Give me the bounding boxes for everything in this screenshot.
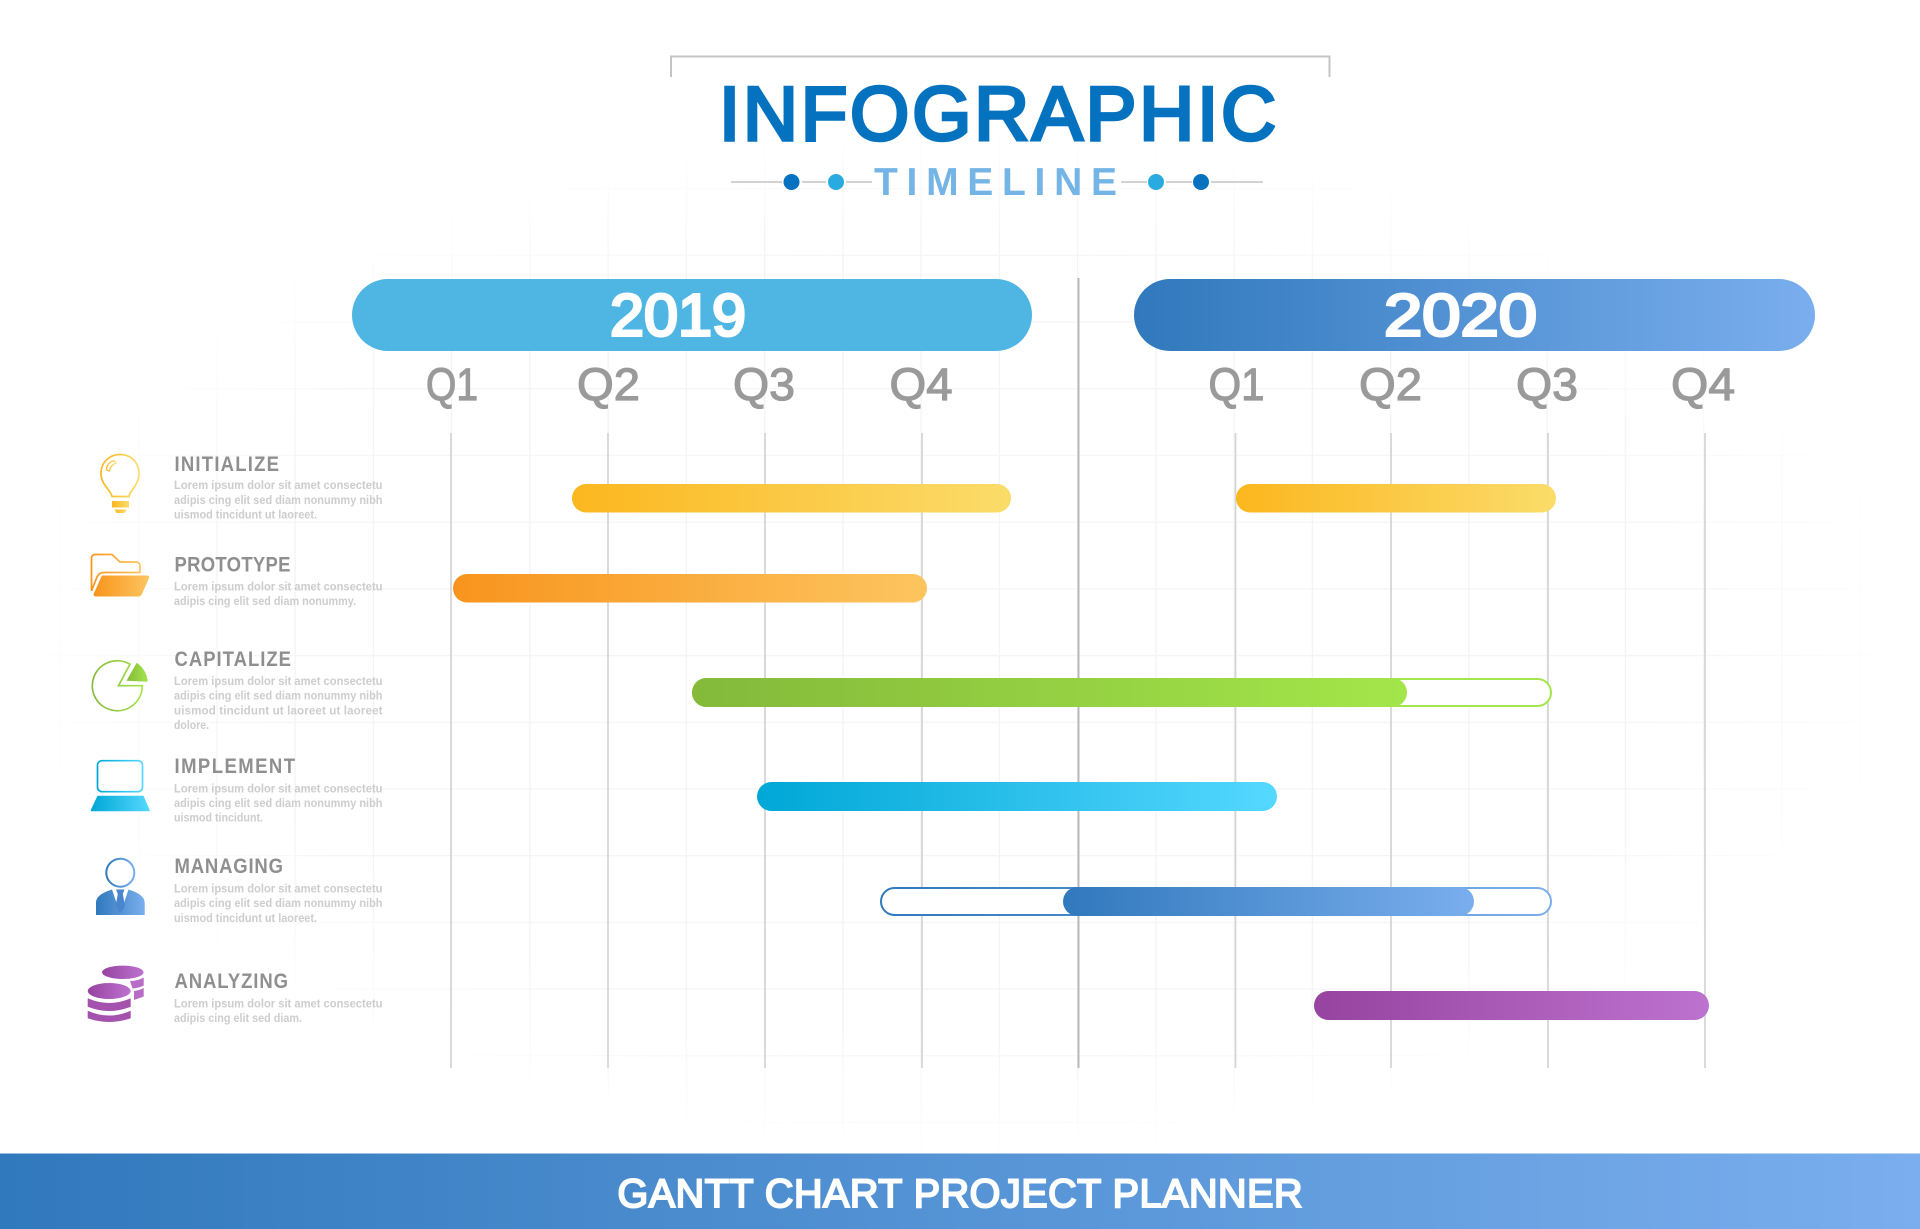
heading: initialize: INITIALIZE [174, 453, 279, 476]
description: managing: uismod tincidunt ut laoreet. [174, 912, 317, 925]
icon: manager [96, 859, 145, 915]
bar: implement [757, 782, 1277, 811]
row: analyzing [88, 966, 382, 1025]
year divider line [1078, 278, 1080, 1068]
description: analyzing: adipis cing elit sed diam. [174, 1012, 302, 1025]
gantt bars [453, 484, 1709, 1020]
description: prototype [174, 580, 382, 608]
heading: implement: IMPLEMENT [174, 755, 296, 778]
year header 2019 [352, 279, 1032, 351]
title bracket [671, 56, 1330, 77]
bar: managing [881, 887, 1551, 916]
description: initialize: Lorem ipsum dolor sit amet consectetu [174, 479, 382, 492]
year header 2020 [1134, 279, 1815, 351]
description: initialize: adipis cing elit sed diam nonummy nibh [174, 494, 382, 507]
quarter labels: Q4 [890, 359, 952, 410]
bar: analyzing [1314, 991, 1709, 1020]
subtitle ornament left [731, 174, 872, 190]
quarter grid lines [451, 433, 1705, 1068]
description: analyzing [174, 997, 382, 1025]
row: capitalize [92, 648, 383, 732]
icon: coin stacks [88, 966, 144, 1022]
quarter labels: Q1 [1208, 359, 1264, 410]
quarter labels: Q2 [577, 359, 640, 410]
heading: prototype: PROTOTYPE [174, 553, 290, 577]
description: capitalize: Lorem ipsum dolor sit amet consectetu [174, 675, 382, 688]
description: analyzing: Lorem ipsum dolor sit amet consectetu [174, 997, 382, 1010]
quarter labels: Q3 [733, 359, 795, 410]
description: capitalize: adipis cing elit sed diam nonummy nibh [174, 690, 382, 702]
description: capitalize: dolore. [174, 719, 209, 732]
description: initialize [174, 479, 382, 522]
description: managing [174, 883, 382, 925]
bar: prototype [453, 574, 927, 602]
row: initialize [101, 453, 382, 522]
description: prototype: adipis cing elit sed diam nonummy. [174, 595, 356, 608]
description: implement: adipis cing elit sed diam nonummy nibh [174, 797, 382, 810]
bar: initialize 2019 [572, 484, 1011, 512]
quarter labels: Q2 [1359, 359, 1422, 410]
footer banner [0, 1154, 1920, 1229]
description: implement: Lorem ipsum dolor sit amet consectetu [174, 782, 382, 795]
year header 2019: 2019 [610, 282, 746, 348]
description: managing: Lorem ipsum dolor sit amet consectetu [174, 883, 382, 896]
description: implement: uismod tincidunt. [174, 812, 263, 825]
quarter labels [426, 359, 1735, 410]
description: managing: adipis cing elit sed diam nonummy nibh [174, 897, 382, 910]
row: implement [91, 755, 382, 825]
icon: folder [92, 554, 149, 596]
subtitle ornament right [1121, 174, 1263, 190]
description: prototype: Lorem ipsum dolor sit amet consectetu [174, 580, 382, 594]
title block [671, 56, 1330, 204]
row: managing [96, 855, 382, 925]
icon: pie chart [92, 661, 148, 711]
description: implement [174, 782, 382, 825]
bar: capitalize [692, 678, 1551, 707]
quarter labels: Q1 [426, 359, 478, 410]
quarter labels: Q3 [1516, 359, 1578, 410]
icon: light bulb [101, 454, 139, 513]
year header 2020: 2020 [1384, 282, 1537, 348]
heading: capitalize: CAPITALIZE [174, 648, 291, 671]
heading: managing: MANAGING [174, 855, 283, 878]
quarter labels: Q4 [1671, 359, 1735, 410]
description: initialize: uismod tincidunt ut laoreet. [174, 508, 317, 522]
row: prototype [92, 553, 382, 608]
footer banner: GANTT CHART PROJECT PLANNER [618, 1172, 1302, 1216]
description: capitalize: uismod tincidunt ut laoreet ut laoreet [174, 704, 383, 717]
heading: analyzing: ANALYZING [174, 970, 288, 993]
description: capitalize [174, 675, 383, 732]
title: INFOGRAPHIC: INFOGRAPHIC [719, 72, 1276, 157]
subtitle: TIMELINE: TIMELINE [874, 161, 1117, 204]
bar: initialize 2020 [1236, 484, 1556, 512]
icon: laptop [91, 761, 150, 811]
